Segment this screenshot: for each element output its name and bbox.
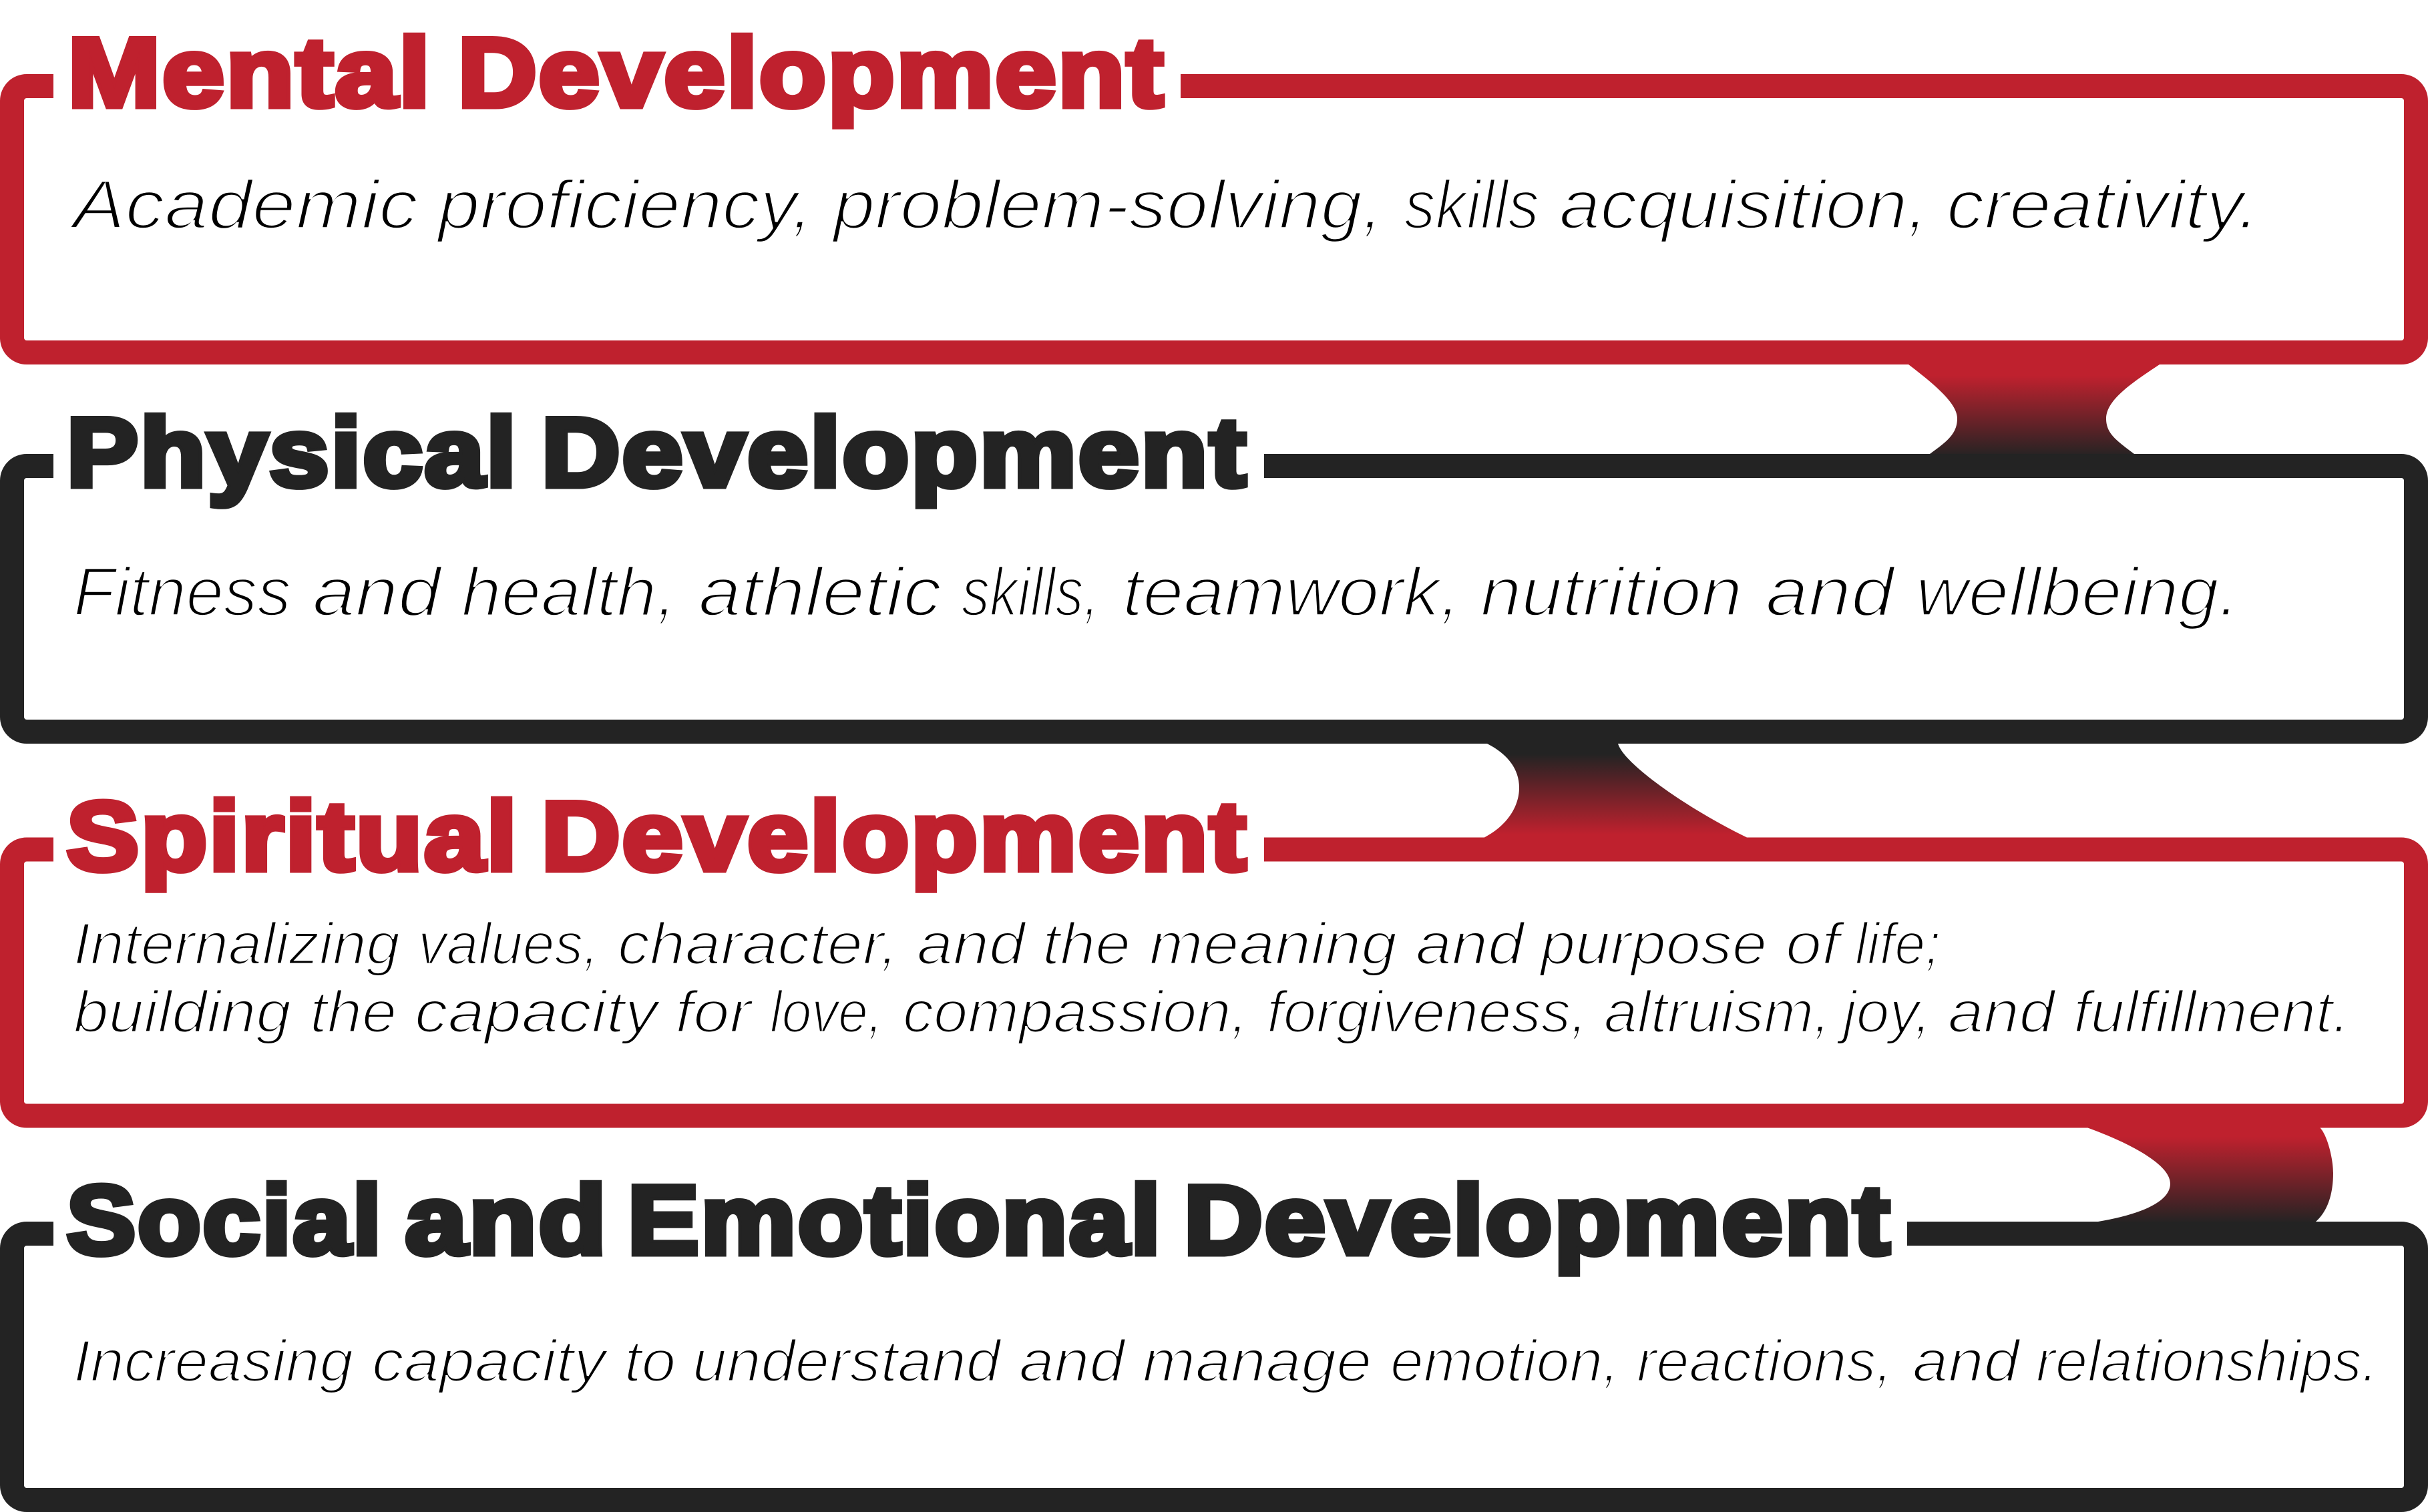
connector: physical to spiritual <box>1484 740 1748 842</box>
panel border: spiritual <box>12 849 2416 1116</box>
panel border: physical <box>12 466 2416 732</box>
heading: physical development: Physical <box>67 398 518 507</box>
description: mental development: acquisition, <box>1559 166 1928 243</box>
description: physical development: Fitness <box>73 553 291 630</box>
panel: social and emotional development <box>12 1166 2416 1500</box>
description: spiritual development: for <box>675 979 754 1045</box>
description: mental development <box>68 166 2259 243</box>
description: spiritual development: of <box>1786 911 1846 977</box>
description: physical development: and <box>313 553 443 630</box>
description: spiritual development: fulfillment. <box>2073 979 2350 1045</box>
description: spiritual development: and <box>1416 911 1526 977</box>
description: physical development: and <box>1766 553 1896 630</box>
panel border: social and emotional <box>12 1234 2416 1500</box>
heading: social and emotional development: Social <box>67 1166 383 1274</box>
heading: mental development: Development <box>458 18 1165 127</box>
heading: spiritual development: Development <box>542 782 1248 891</box>
description: social and emotional development: to <box>624 1328 676 1394</box>
connector: spiritual to social and emotional <box>2087 1123 2333 1227</box>
description: spiritual development: character, <box>618 911 898 977</box>
description: social and emotional development: capacity <box>372 1328 609 1394</box>
description: physical development: teamwork, <box>1123 553 1460 630</box>
description: spiritual development: capacity <box>415 979 662 1045</box>
description: spiritual development: Internalizing <box>73 911 400 977</box>
description: spiritual development: life; <box>1855 911 1941 977</box>
description: spiritual development: and <box>917 911 1027 977</box>
description: spiritual development: joy, <box>1836 979 1931 1045</box>
description: social and emotional development: understand <box>692 1328 1002 1394</box>
panel: spiritual development <box>12 782 2416 1116</box>
description: social and emotional development: manage <box>1143 1328 1372 1394</box>
heading: social and emotional development: and <box>405 1166 608 1274</box>
description: social and emotional development: relationships. <box>2036 1328 2378 1394</box>
description: social and emotional development: Increasing <box>73 1328 353 1394</box>
heading: physical development <box>67 398 1248 507</box>
description: social and emotional development: reactions, <box>1637 1328 1892 1394</box>
description: physical development: athletic <box>698 553 942 630</box>
description: mental development: proficiency, <box>436 166 813 243</box>
description: spiritual development: compassion, <box>903 979 1248 1045</box>
description: mental development: skills <box>1404 166 1539 243</box>
description: physical development: nutrition <box>1480 553 1742 630</box>
description: spiritual development: the <box>1042 911 1131 977</box>
description: social and emotional development: and <box>1019 1328 1127 1394</box>
description: mental development: problem-solving, <box>831 166 1383 243</box>
heading: spiritual development: Spiritual <box>67 782 519 891</box>
description: spiritual development: building <box>73 979 291 1045</box>
description: physical development: wellbeing. <box>1916 553 2239 630</box>
description: spiritual development: and <box>1948 979 2057 1045</box>
description: physical development <box>73 553 2239 630</box>
description: spiritual development: altruism, <box>1604 979 1830 1045</box>
description: spiritual development: meaning <box>1149 911 1397 977</box>
description: physical development: health, <box>461 553 676 630</box>
heading: social and emotional development <box>67 1166 1892 1274</box>
heading: physical development: Development <box>542 398 1248 507</box>
description: social and emotional development: and <box>1912 1328 2021 1394</box>
panel border: mental <box>12 86 2416 352</box>
panel: mental development <box>12 18 2416 352</box>
heading: mental development <box>68 18 1165 127</box>
description: mental development: Academic <box>68 166 418 243</box>
description: spiritual development: forgiveness, <box>1267 979 1587 1045</box>
description: physical development: skills, <box>962 553 1099 630</box>
description: social and emotional development: emotion, <box>1390 1328 1619 1394</box>
description: spiritual development: values, <box>418 911 599 977</box>
description: spiritual development: the <box>310 979 397 1045</box>
description: spiritual development <box>73 911 2350 1045</box>
description: spiritual development: love, <box>770 979 883 1045</box>
heading: spiritual development <box>67 782 1248 891</box>
heading: social and emotional development: Emotional <box>628 1166 1163 1274</box>
description: mental development: creativity. <box>1947 166 2259 243</box>
heading: social and emotional development: Development <box>1184 1166 1892 1274</box>
description: spiritual development: purpose <box>1539 911 1767 977</box>
panel: physical development <box>12 398 2416 732</box>
connector: mental to physical <box>1908 360 2160 461</box>
heading: mental development: Mental <box>68 18 432 127</box>
description: social and emotional development <box>73 1328 2378 1394</box>
